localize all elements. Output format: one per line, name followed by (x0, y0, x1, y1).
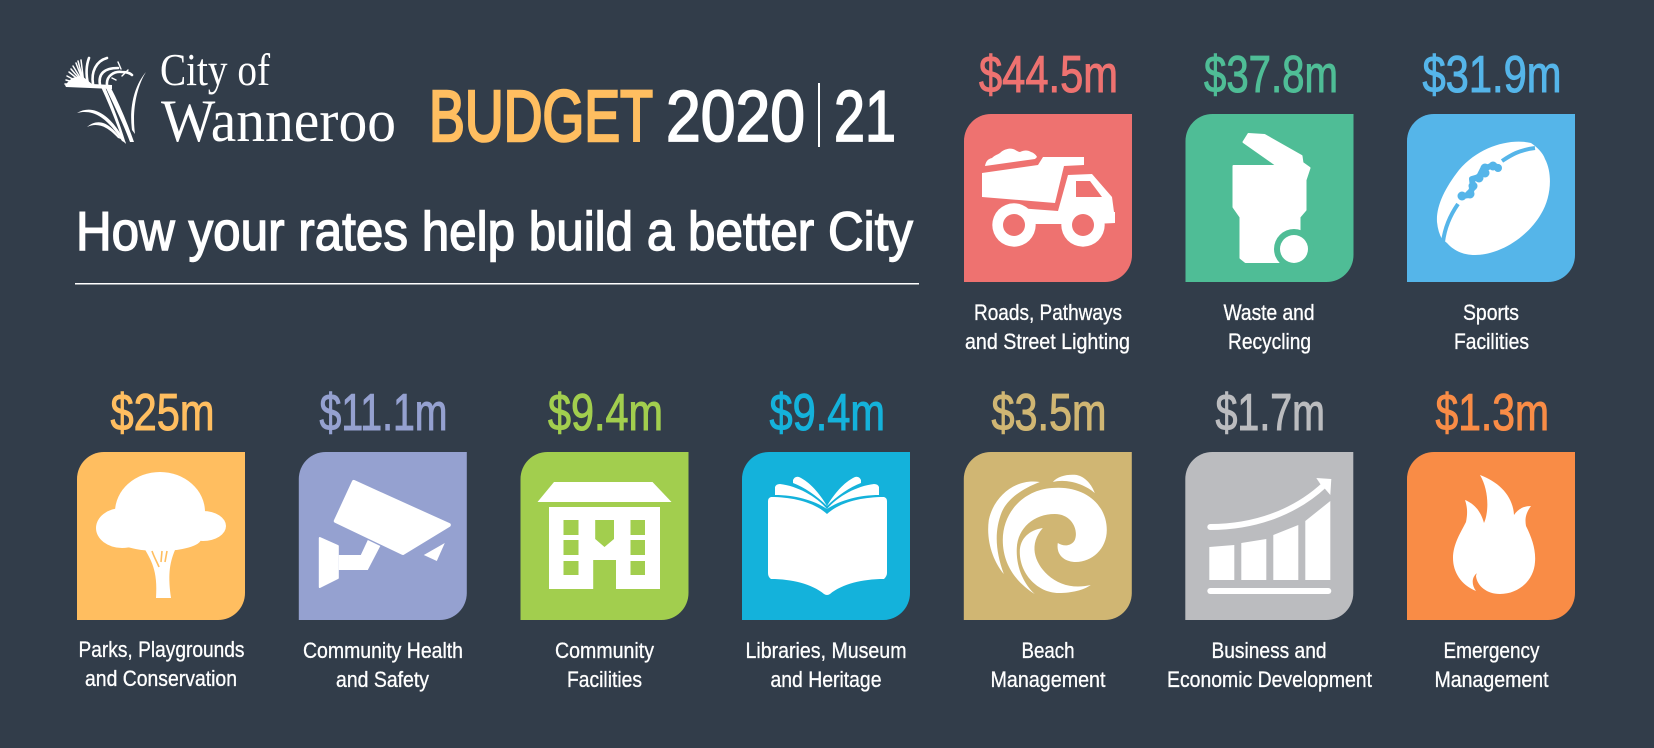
item: Waste and Recycling (1186, 46, 1354, 354)
heading word: BUDGET: BUDGET (429, 77, 653, 157)
icon: tree (77, 452, 245, 620)
amount: $37.8m: $37.8m (1204, 46, 1338, 104)
item: Parks, Playgrounds and Conservation (77, 384, 245, 691)
label: Emergency Management: Emergency (1444, 638, 1540, 663)
label: Emergency Management: Management (1434, 667, 1548, 692)
item: Emergency Management (1407, 384, 1575, 692)
item: Business and Economic Development (1167, 384, 1372, 692)
label: Parks, Playgrounds and Conservation: and Conservation (85, 666, 237, 691)
label: Business and Economic Development: Economic Development (1167, 667, 1372, 692)
label: Parks, Playgrounds and Conservation: Parks, Playgrounds (78, 637, 244, 662)
label: Sports Facilities: Sports (1463, 300, 1519, 325)
label: Business and Economic Development (1167, 638, 1372, 692)
heading: Budget 2020|21 (429, 77, 896, 157)
item: Roads, Pathways and Street Lighting (964, 46, 1132, 354)
label: Waste and Recycling: Recycling (1228, 329, 1311, 354)
logo text: City of: City of (160, 44, 271, 95)
label: Community Facilities: Community (555, 638, 654, 663)
amount: $1.3m: $1.3m (1436, 384, 1549, 442)
logo: City of Wanneroo (65, 44, 396, 154)
label: Sports Facilities: Facilities (1454, 329, 1529, 354)
amount: $11.1m: $11.1m (320, 384, 448, 442)
label: Libraries, Museum and Heritage (746, 638, 906, 692)
label: Emergency Management (1434, 638, 1548, 692)
item: Libraries, Museum and Heritage (742, 384, 910, 692)
label: Waste and Recycling (1224, 300, 1314, 354)
amount: $1.7m: $1.7m (1216, 384, 1325, 442)
item: Community Facilities (520, 384, 688, 692)
label: Roads, Pathways and Street Lighting (965, 300, 1130, 354)
label: Libraries, Museum and Heritage: and Heritage (770, 667, 882, 692)
logo text: Wanneroo: Wanneroo (161, 88, 396, 154)
label: Beach Management (990, 638, 1106, 692)
label: Parks, Playgrounds and Conservation (78, 637, 244, 691)
label: Community Health and Safety: and Safety (336, 667, 429, 692)
item: Beach Management (964, 384, 1132, 692)
amount: $25m: $25m (110, 384, 214, 442)
heading year: 2020: 2020 (666, 77, 805, 157)
item: Sports Facilities (1407, 46, 1575, 354)
label: Sports Facilities (1454, 300, 1529, 354)
label: Libraries, Museum and Heritage: Libraries, Museum (746, 638, 906, 663)
label: Community Facilities (555, 638, 654, 692)
heading year: 21: 21 (834, 77, 896, 157)
icon: wave (964, 452, 1132, 620)
item: Community Health and Safety (299, 384, 467, 692)
icon: football (1407, 114, 1575, 282)
icon: security camera (299, 452, 467, 620)
label: Community Health and Safety: Community Health (303, 638, 463, 663)
amount: $3.5m: $3.5m (992, 384, 1106, 442)
icon: kangaroo paw (65, 58, 146, 144)
icon: dump truck (964, 114, 1132, 282)
amount: $9.4m: $9.4m (770, 384, 885, 442)
icon: building (520, 452, 688, 620)
label: Roads, Pathways and Street Lighting: Roads, Pathways (974, 300, 1122, 325)
label: Business and Economic Development: Business and (1212, 638, 1326, 663)
subtitle: How your rates help build a better City (76, 200, 913, 262)
icon: wheelie bin (1186, 114, 1354, 282)
label: Community Health and Safety (303, 638, 463, 692)
label: Beach Management: Management (990, 667, 1106, 692)
amount: $31.9m: $31.9m (1422, 46, 1562, 104)
label: Roads, Pathways and Street Lighting: and Street Lighting (965, 329, 1130, 354)
icon: flame (1407, 452, 1575, 620)
icon: growth chart (1185, 452, 1353, 620)
label: Community Facilities: Facilities (567, 667, 642, 692)
label: Waste and Recycling: Waste and (1224, 300, 1314, 325)
amount: $9.4m: $9.4m (548, 384, 663, 442)
label: Beach Management: Beach (1022, 638, 1074, 663)
icon: open book (742, 452, 910, 620)
amount: $44.5m: $44.5m (979, 46, 1118, 104)
